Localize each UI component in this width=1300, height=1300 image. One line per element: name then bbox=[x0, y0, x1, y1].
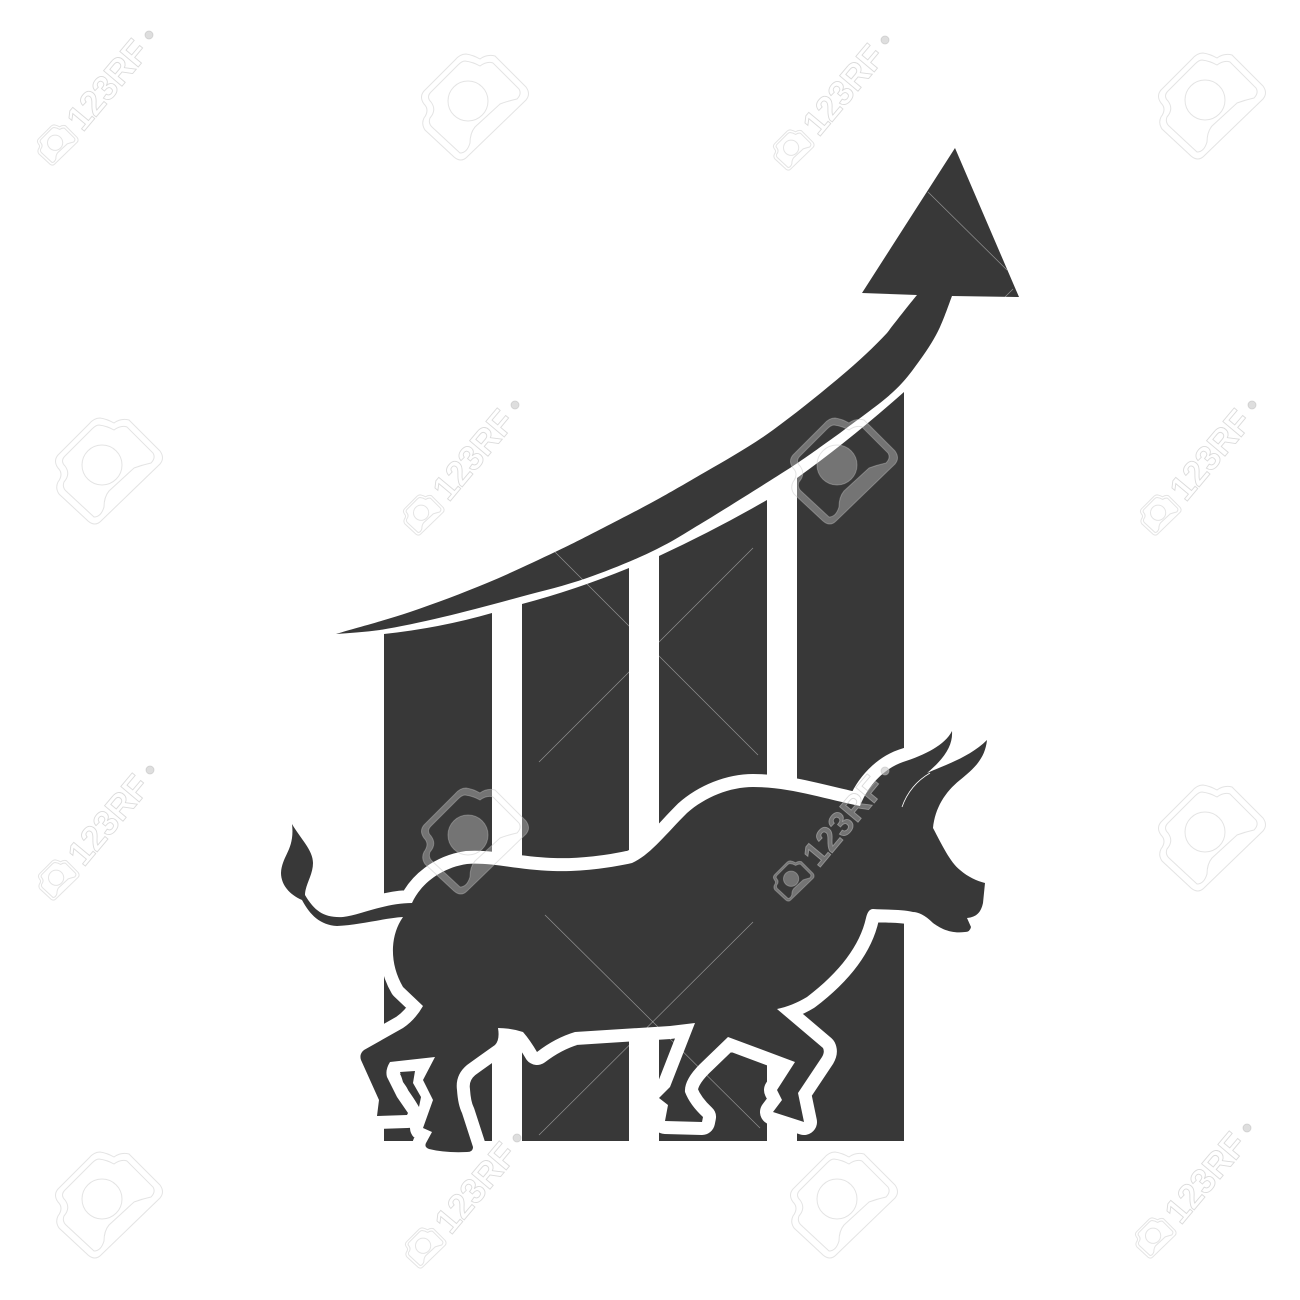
bar 1 bbox=[384, 613, 492, 1141]
watermark: 123RF logo, row 4 column 4 bbox=[1135, 1124, 1255, 1258]
watermark: 123RF logo, row 2 column 4: 123RF bbox=[1162, 402, 1260, 508]
watermark: large camera icon, row 3 column 4 bbox=[1158, 785, 1266, 891]
watermark: large camera icon, row 3 column 2 bbox=[422, 788, 528, 894]
watermark: large camera icon, row 2 column 3 bbox=[790, 418, 898, 524]
watermark: large camera icon, row 4 column 1 bbox=[56, 1152, 162, 1258]
watermark: 123RF logo, row 1 column 3: 123RF bbox=[795, 37, 893, 143]
watermark: 123RF logo, row 4 column 2: 123RF bbox=[427, 1135, 525, 1241]
watermark: 123RF logo, row 3 column 3 bbox=[773, 767, 893, 901]
bull silhouette with white halo bbox=[281, 731, 987, 1152]
watermark: 123RF logo, row 4 column 2 bbox=[405, 1134, 525, 1268]
watermark: large camera icon, row 4 column 3 bbox=[790, 1152, 898, 1258]
watermark: large camera icon, row 2 column 1 bbox=[56, 418, 162, 524]
bar chart: four rising bars bbox=[384, 392, 904, 1141]
watermark: 123RF logo, row 3 column 3: 123RF bbox=[795, 768, 893, 874]
watermark: 123RF logo, row 3 column 1 bbox=[38, 766, 158, 900]
bar 3 bbox=[659, 500, 767, 1141]
bar fragment between hind legs bbox=[400, 1071, 421, 1107]
watermark: 123RF logo, row 2 column 2 bbox=[403, 401, 523, 535]
watermark: 123RF logo, row 3 column 1: 123RF bbox=[60, 767, 158, 873]
watermark: 123RF logo, row 4 column 4: 123RF bbox=[1157, 1125, 1255, 1231]
watermark: 123RF logo, row 1 column 1 bbox=[37, 31, 157, 165]
watermark: large camera icon, row 1 column 4 bbox=[1158, 53, 1266, 159]
horn separation line bbox=[902, 773, 930, 807]
watermark: 123RF logo, row 2 column 4 bbox=[1140, 401, 1260, 535]
watermark: 123RF logo, row 1 column 1: 123RF bbox=[59, 32, 157, 138]
bar 4 bbox=[797, 392, 904, 1141]
watermark: 123RF logo, row 1 column 3 bbox=[773, 36, 893, 170]
watermark: large camera icon, row 1 column 2 bbox=[422, 54, 528, 160]
bar 2 bbox=[522, 568, 629, 1141]
watermark: 123RF logo, row 2 column 2: 123RF bbox=[425, 402, 523, 508]
arrow: rising growth curve bbox=[336, 148, 1019, 634]
